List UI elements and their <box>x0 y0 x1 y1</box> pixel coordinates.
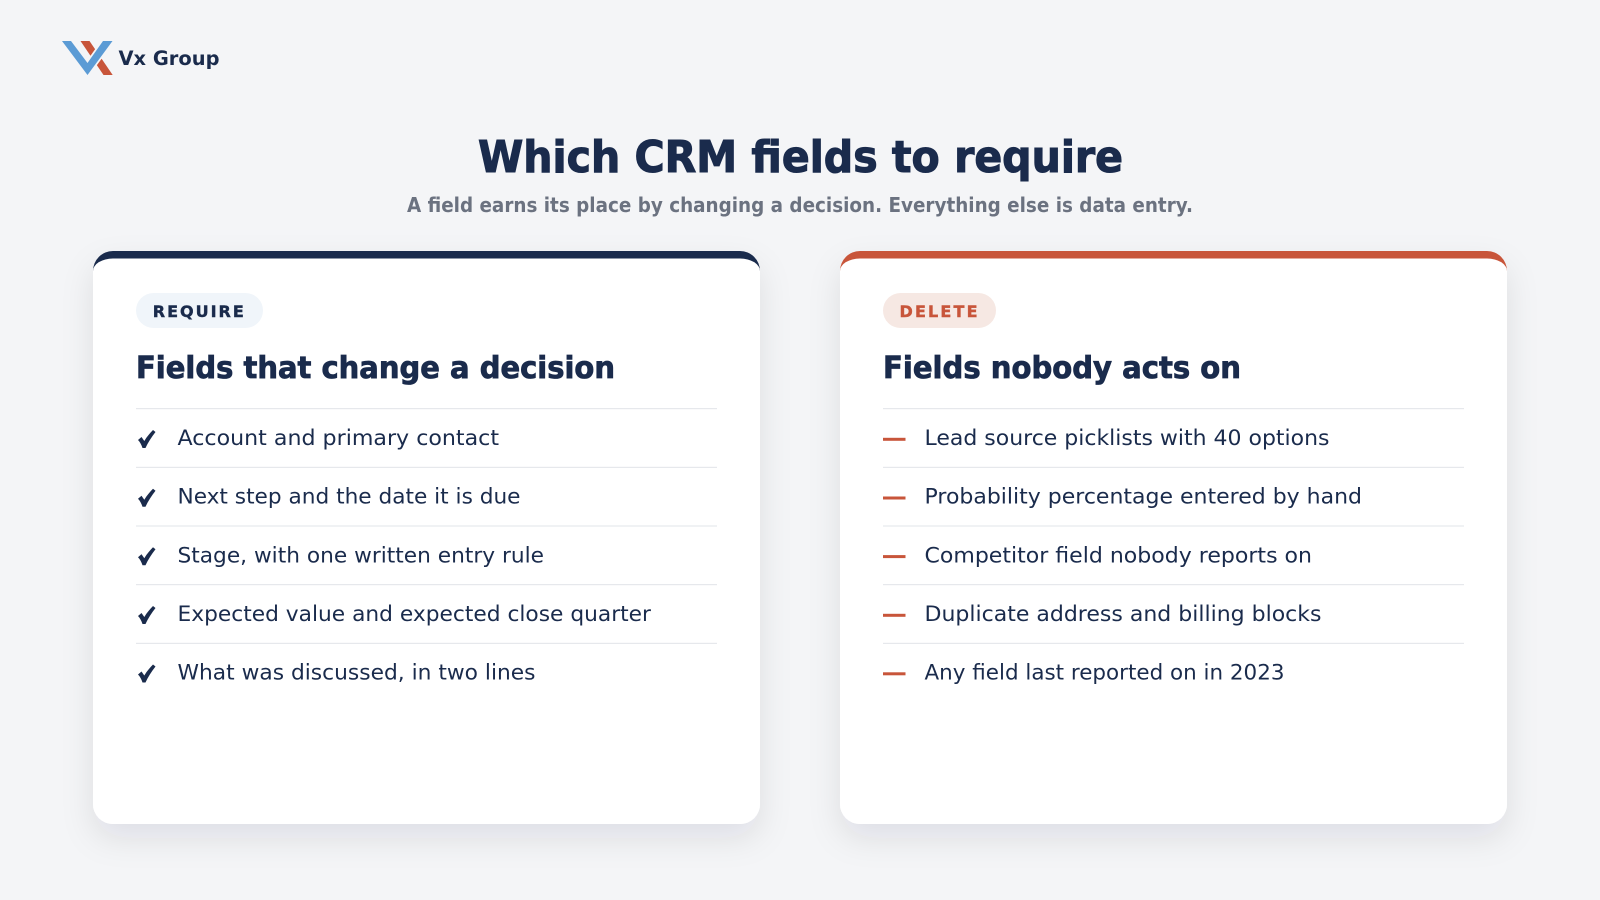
item 4: Duplicate address and billing blocks <box>924 602 1322 627</box>
panel: require <box>93 251 760 824</box>
badge: delete: DELETE <box>900 302 978 321</box>
logo: Vx Group <box>62 41 220 75</box>
heading: delete: Fields nobody acts on <box>883 351 1241 386</box>
item 1: Account and primary contact <box>178 426 499 451</box>
list: fields to delete <box>883 426 1362 686</box>
panel: delete <box>840 251 1507 824</box>
badge: delete <box>883 293 996 328</box>
title: Which CRM fields to require <box>478 132 1123 183</box>
subtitle: A field earns its place by changing a decision. Everything else is data entry. <box>407 193 1193 217</box>
heading: require: Fields that change a decision <box>136 351 615 386</box>
badge: require <box>136 293 263 328</box>
item 1: Lead source picklists with 40 options <box>924 426 1330 451</box>
card background <box>93 251 760 824</box>
logo wordmark: Vx Group <box>118 47 220 70</box>
card background <box>840 251 1507 824</box>
item 3: Competitor field nobody reports on <box>924 543 1312 568</box>
list: required fields <box>138 426 651 686</box>
item 2: Next step and the date it is due <box>178 485 520 510</box>
item 4: Expected value and expected close quarter <box>178 602 651 627</box>
badge: require: REQUIRE <box>153 302 244 321</box>
item 5: What was discussed, in two lines <box>178 660 536 686</box>
item 2: Probability percentage entered by hand <box>924 485 1362 510</box>
icon: Vx mark <box>62 41 113 75</box>
item 5: Any field last reported on in 2023 <box>924 660 1284 686</box>
item 3: Stage, with one written entry rule <box>178 543 544 568</box>
